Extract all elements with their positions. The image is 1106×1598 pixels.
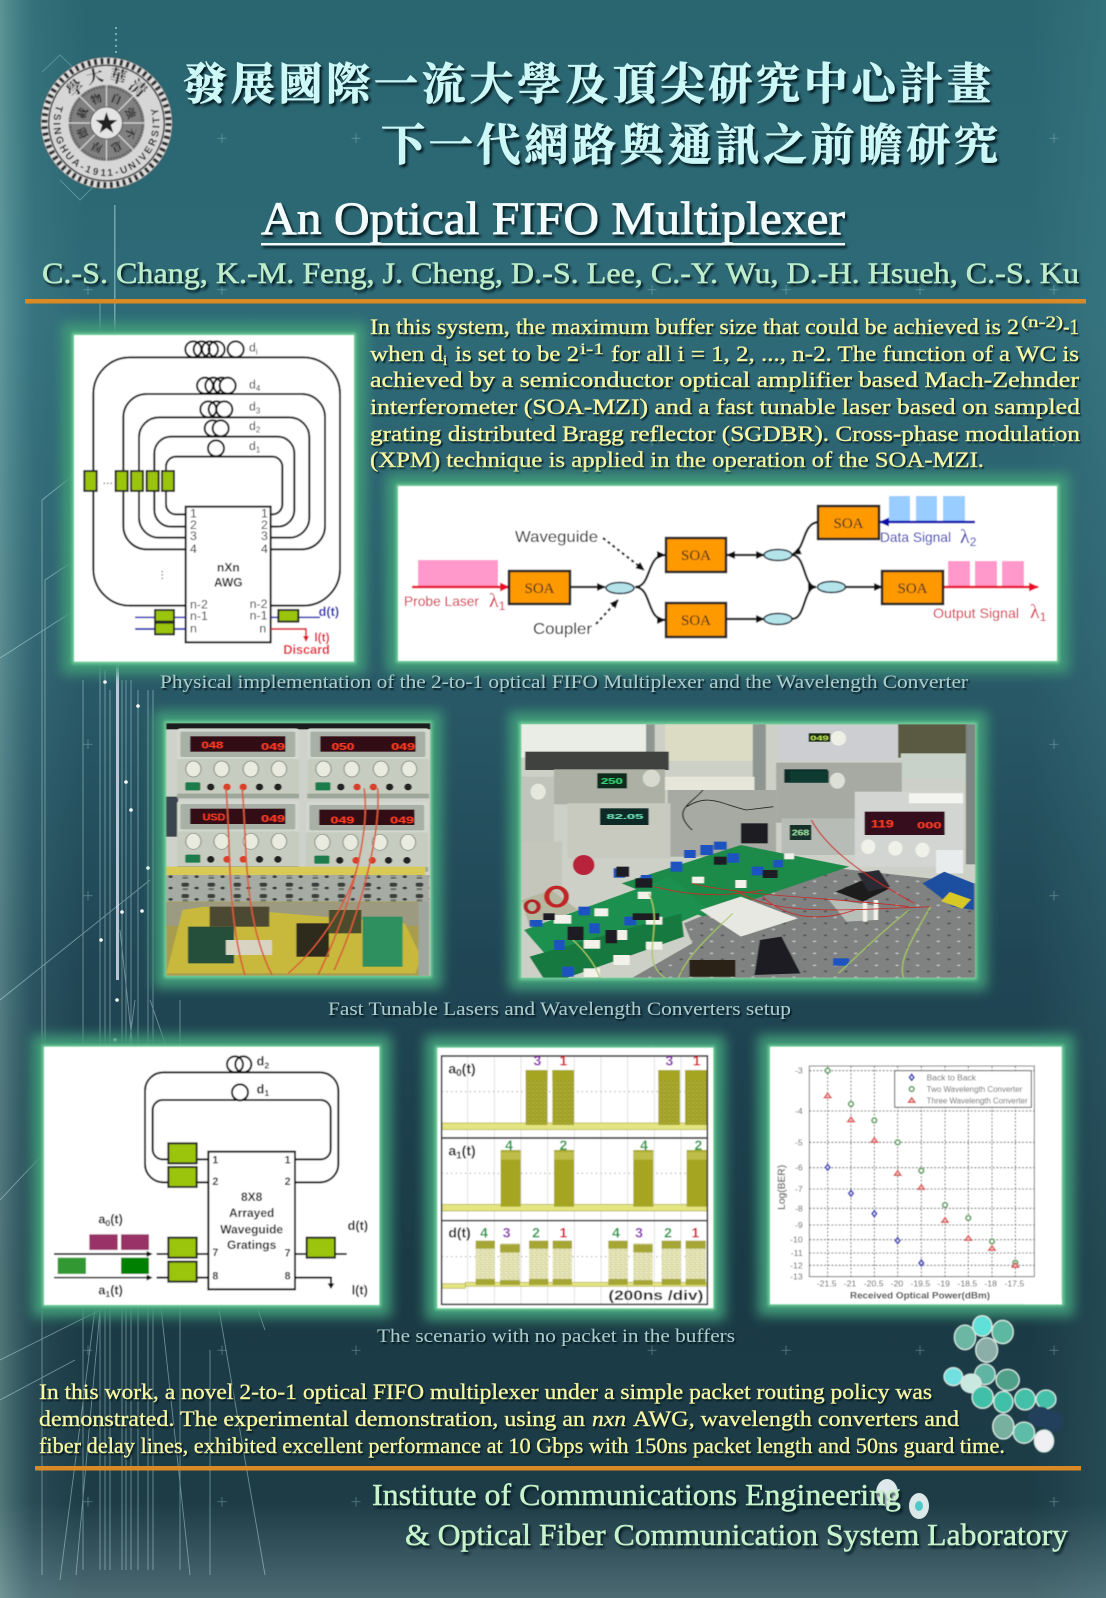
caption: lasers and converters setup: Fast Tunable Lasers and Wavelength Converters setup — [328, 1000, 791, 1020]
panel: wavelength converter diagram: 1 — [1040, 610, 1047, 624]
text block: conclusion: demonstrated. The experimental demonstration, using an — [39, 1406, 585, 1431]
panel: AWG FIFO architecture diagram: AWG — [214, 576, 243, 590]
photo: laboratory setup: 119 — [871, 818, 894, 830]
text block: system description: -1 — [1063, 314, 1079, 339]
panel: AWG FIFO architecture diagram: n-1 — [190, 609, 208, 623]
panel: 8X8 AWG scenario diagram: (t) — [110, 1212, 123, 1226]
photo: power supplies: 049 — [391, 741, 415, 752]
text block: system description: grating distributed Bragg reflector (SGDBR). Cross-phase modulation — [370, 421, 1080, 446]
text block: system description: i-1 — [580, 341, 604, 358]
panel: 8X8 AWG scenario diagram: 2 — [264, 1060, 269, 1070]
panel: 8X8 AWG scenario diagram: l(t) — [352, 1283, 368, 1297]
panel: wavelength converter diagram: SOA — [897, 581, 928, 597]
panel: 8X8 AWG scenario diagram: 7 — [285, 1248, 291, 1260]
logo: Tsinghua University seal — [40, 56, 173, 190]
panel: BER chart — [758, 1035, 1074, 1316]
photo: power supplies: USD — [203, 812, 226, 823]
panel: BER chart: -21 — [844, 1279, 856, 1289]
text block: system description: (XPM) technique is applied in the operation of the SOA-MZI. — [370, 447, 984, 472]
panel: BER chart: -17.5 — [1004, 1279, 1024, 1289]
panel: AWG FIFO architecture diagram: 4 — [256, 384, 261, 393]
panel: wavelength converter diagram: 2 — [970, 535, 977, 549]
panel: 8X8 AWG scenario diagram: 1 — [285, 1154, 291, 1166]
panel: 8X8 AWG scenario diagram: 1 — [264, 1088, 269, 1098]
panel: oscilloscope traces: 4 — [480, 1225, 488, 1241]
logo: Tsinghua University seal: 不 — [122, 125, 138, 141]
panel: AWG FIFO architecture diagram: Discard — [283, 643, 330, 657]
text block: conclusion: fiber delay lines, exhibited excellent performance at 10 Gbps with 150ns packet length and 50ns guard time. — [39, 1433, 1005, 1458]
panel: AWG FIFO architecture diagram: n — [190, 621, 197, 635]
text block: system description: (n-2) — [1021, 314, 1063, 331]
panel: oscilloscope traces: (200ns /div) — [608, 1287, 703, 1303]
logo: Tsinghua University seal: 清 — [125, 75, 151, 101]
logo: Tsinghua University seal: 載 — [74, 106, 91, 121]
panel: 8X8 AWG scenario diagram: a — [98, 1212, 105, 1226]
heading: Chinese program title: 下一代網路與通訊之前瞻研究 — [381, 121, 998, 170]
panel: AWG FIFO architecture diagram: ... — [103, 473, 113, 487]
panel: wavelength converter diagram: SOA — [681, 548, 711, 564]
caption: physical implementation: Physical implementation of the 2-to-1 optical FIFO Multiplexer and the Wavelength Converter — [160, 673, 968, 693]
panel: oscilloscope traces: d(t) — [448, 1224, 471, 1240]
decoration: fiber bubbles — [944, 1316, 1063, 1452]
photo: laboratory setup: 000 — [917, 820, 941, 831]
title: An Optical FIFO Multiplexer — [261, 193, 845, 245]
panel: oscilloscope traces: 3 — [503, 1225, 511, 1241]
logo: Tsinghua University seal: 德 — [74, 124, 91, 141]
logo: Tsinghua University seal: 自 — [109, 90, 124, 107]
panel: oscilloscope traces: 4 — [612, 1225, 620, 1241]
caption: scenario: The scenario with no packet in the buffers — [377, 1327, 735, 1347]
panel: BER chart: -18.5 — [957, 1279, 977, 1289]
panel: oscilloscope traces — [425, 1036, 725, 1320]
text block: system description: for all i = 1, 2, ..., n-2. The function of a WC is — [611, 341, 1079, 366]
panel: 8X8 AWG scenario diagram: Arrayed — [229, 1206, 274, 1220]
panel: AWG FIFO architecture diagram: d — [249, 400, 256, 414]
panel: wavelength converter diagram: Output Signal — [933, 605, 1019, 621]
logo: Tsinghua University seal: 學 — [62, 76, 88, 102]
panel: BER chart: -4 — [795, 1106, 803, 1116]
panel: 8X8 AWG scenario diagram: Waveguide — [220, 1222, 283, 1236]
panel: oscilloscope traces: 0 — [456, 1068, 462, 1079]
text block: system description — [370, 314, 1080, 472]
photo: laboratory setup: 82.05 — [606, 813, 644, 821]
panel: wavelength converter diagram: λ — [489, 590, 499, 612]
panel: oscilloscope traces: 1 — [691, 1225, 699, 1241]
panel: 8X8 AWG scenario diagram: 0 — [105, 1218, 110, 1228]
panel: oscilloscope traces: 3 — [665, 1053, 673, 1069]
panel: BER chart: -8 — [795, 1203, 803, 1213]
text block: conclusion: In this work, a novel 2-to-1 optical FIFO multiplexer under a simple packet routing policy was — [39, 1379, 932, 1404]
panel: AWG FIFO architecture diagram: n — [259, 621, 266, 635]
text block: system description: achieved by a semiconductor optical amplifier based Mach-Zehnder — [370, 367, 1080, 392]
panel: 8X8 AWG scenario diagram: d — [257, 1055, 264, 1069]
panel: oscilloscope traces: a — [448, 1143, 456, 1159]
panel: AWG FIFO architecture diagram: n-2 — [250, 597, 268, 611]
panel: 8X8 AWG scenario diagram: Gratings — [227, 1238, 277, 1252]
panel: oscilloscope traces: 1 — [456, 1150, 462, 1161]
panel: AWG FIFO architecture diagram: n-1 — [250, 608, 268, 622]
text block: system description: i — [443, 353, 447, 369]
authors: C.-S. Chang, K.-M. Feng, J. Cheng, D.-S. Lee, C.-Y. Wu, D.-H. Hsueh, C.-S. Ku — [42, 257, 1079, 290]
photo: power supplies: 049 — [261, 741, 285, 752]
panel: 8X8 AWG scenario diagram — [32, 1035, 391, 1317]
panel: AWG FIFO architecture diagram: l(t) — [314, 631, 330, 645]
panel: AWG FIFO architecture diagram: 1 — [261, 506, 268, 520]
panel: oscilloscope traces: 2 — [664, 1225, 672, 1241]
panel: AWG FIFO architecture diagram: d — [249, 341, 256, 355]
panel: AWG FIFO architecture diagram: d(t) — [319, 605, 339, 619]
panel: BER chart: -13 — [790, 1272, 803, 1282]
panel: oscilloscope traces: 1 — [559, 1053, 567, 1069]
panel: wavelength converter diagram: Waveguide — [515, 529, 598, 546]
text block: system description: interferometer (SOA-MZI) and a fast tunable laser based on sampled — [370, 394, 1080, 419]
photo: power supplies: 049 — [331, 814, 354, 826]
panel: oscilloscope traces: 3 — [533, 1053, 541, 1069]
panel: AWG FIFO architecture diagram: d — [249, 419, 256, 433]
panel: 8X8 AWG scenario diagram: d — [257, 1082, 264, 1096]
panel: AWG FIFO architecture diagram: 2 — [190, 518, 197, 532]
panel: AWG FIFO architecture diagram: 3 — [261, 529, 268, 543]
photo: power supplies: 049 — [261, 813, 285, 824]
panel: AWG FIFO architecture diagram: 3 — [256, 406, 261, 415]
panel: 8X8 AWG scenario diagram: 1 — [212, 1154, 218, 1166]
photo: power supplies: 048 — [201, 740, 224, 751]
panel: 8X8 AWG scenario diagram: d(t) — [348, 1219, 368, 1233]
panel: AWG FIFO architecture diagram: d — [249, 439, 256, 453]
panel: AWG FIFO architecture diagram: 2 — [256, 426, 261, 435]
text block: system description: when d — [370, 341, 443, 366]
panel: AWG FIFO architecture diagram: 4 — [190, 542, 197, 556]
panel: oscilloscope traces: 1 — [693, 1053, 701, 1069]
panel: BER chart: -21.5 — [817, 1279, 837, 1289]
panel: oscilloscope traces: (t) — [462, 1060, 476, 1076]
panel: oscilloscope traces: 2 — [559, 1137, 567, 1153]
photo: laboratory setup: 049 — [810, 734, 829, 743]
panel: AWG FIFO architecture diagram: 3 — [190, 529, 197, 543]
photo: power supplies: 049 — [390, 814, 414, 826]
logo: Tsinghua University seal: 息 — [108, 138, 124, 156]
logo: Tsinghua University seal: 強 — [122, 105, 139, 122]
panel: BER chart: -3 — [795, 1066, 803, 1076]
panel: BER chart: Log(BER) — [777, 1165, 788, 1210]
panel: AWG FIFO architecture diagram: nXn — [217, 561, 240, 575]
panel: 8X8 AWG scenario diagram: (t) — [110, 1283, 123, 1297]
photo: power supplies: 050 — [332, 741, 354, 752]
panel: wavelength converter diagram: Data Signal — [880, 529, 951, 545]
panel: BER chart: -11 — [791, 1248, 803, 1258]
logo: Tsinghua University seal: 大 — [84, 66, 106, 88]
text block: system description: In this system, the maximum buffer size that could be achieved is 2 — [370, 314, 1019, 339]
panel: wavelength converter diagram: Coupler — [533, 621, 593, 638]
text block: system description: is set to be 2 — [455, 341, 579, 366]
panel: oscilloscope traces: a — [448, 1060, 456, 1076]
photo: laboratory setup: 268 — [792, 828, 810, 838]
footer: affiliation: Institute of Communications Engineering — [372, 1477, 901, 1512]
panel: AWG FIFO architecture diagram: d — [249, 377, 256, 391]
logo: Tsinghua University seal: 厚 — [89, 139, 104, 156]
panel: AWG FIFO architecture diagram: 2 — [261, 518, 268, 532]
heading: Chinese program title — [183, 60, 998, 170]
panel: oscilloscope traces: 4 — [640, 1137, 648, 1153]
heading: Chinese program title: 發展國際一流大學及頂尖研究中心計畫 — [183, 60, 991, 109]
photo: laboratory setup: 250 — [601, 777, 623, 786]
panel: BER chart: -7 — [795, 1184, 803, 1194]
panel: wavelength converter diagram: λ — [960, 526, 970, 548]
panel: AWG FIFO architecture diagram: ... — [159, 570, 173, 580]
panel: oscilloscope traces: 2 — [532, 1225, 540, 1241]
panel: BER chart: Received Optical Power(dBm) — [850, 1290, 990, 1300]
panel: BER chart: -20.5 — [864, 1279, 884, 1289]
photo: power supplies — [154, 711, 442, 988]
logo: Tsinghua University seal: 物 — [89, 90, 104, 108]
text block: conclusion: nxn — [592, 1406, 626, 1431]
panel: oscilloscope traces: (t) — [462, 1143, 476, 1159]
panel: 8X8 AWG scenario diagram: 2 — [212, 1176, 218, 1188]
panel: 8X8 AWG scenario diagram: 1 — [105, 1289, 110, 1299]
panel: oscilloscope traces: 4 — [505, 1137, 513, 1153]
panel: wavelength converter diagram: Probe Laser — [404, 593, 479, 609]
panel: AWG FIFO architecture diagram: i — [256, 347, 258, 356]
panel: BER chart: -19.5 — [910, 1279, 930, 1289]
footer: affiliation: & Optical Fiber Communication System Laboratory — [405, 1517, 1069, 1552]
footer: affiliation — [372, 1477, 1069, 1552]
panel: wavelength converter diagram — [386, 474, 1069, 673]
panel: 8X8 AWG scenario diagram: 8 — [285, 1270, 291, 1282]
panel: BER chart: -20 — [891, 1279, 903, 1289]
panel: 8X8 AWG scenario diagram: 7 — [212, 1247, 218, 1259]
panel: 8X8 AWG scenario diagram: 8 — [212, 1270, 218, 1282]
photo: laboratory setup — [509, 712, 987, 990]
panel: BER chart: -10 — [790, 1235, 803, 1245]
panel: oscilloscope traces: 1 — [559, 1225, 567, 1241]
panel: wavelength converter diagram: SOA — [833, 516, 864, 532]
panel: BER chart: -6 — [795, 1163, 803, 1173]
panel: AWG FIFO architecture diagram: 1 — [256, 446, 261, 455]
panel: BER chart: -12 — [790, 1260, 803, 1270]
panel: 8X8 AWG scenario diagram: a — [98, 1283, 105, 1297]
panel: wavelength converter diagram: SOA — [681, 613, 711, 629]
panel: BER chart: -18 — [984, 1279, 997, 1289]
panel: BER chart: Two Wavelength Converter — [927, 1085, 1023, 1094]
logo: Tsinghua University seal: 華 — [107, 65, 129, 88]
panel: AWG FIFO architecture diagram — [62, 323, 366, 674]
logo: Tsinghua University seal: TSINGHUA-1911-UNIVERSITY — [53, 106, 160, 177]
text block: conclusion: AWG, wavelength converters and — [633, 1406, 959, 1431]
panel: wavelength converter diagram: λ — [1030, 601, 1040, 623]
text block: conclusion — [39, 1379, 1005, 1458]
panel: oscilloscope traces: 2 — [694, 1137, 702, 1153]
panel: AWG FIFO architecture diagram: 4 — [261, 542, 268, 556]
panel: oscilloscope traces: 3 — [635, 1225, 643, 1241]
panel: BER chart: Three Wavelength Converter — [927, 1096, 1028, 1105]
decoration: lower fiber beads — [876, 1479, 929, 1519]
panel: BER chart: Back to Back — [927, 1073, 976, 1082]
panel: AWG FIFO architecture diagram: n-2 — [190, 598, 208, 612]
panel: BER chart: -9 — [795, 1220, 803, 1230]
panel: 8X8 AWG scenario diagram: 8X8 — [241, 1190, 263, 1204]
panel: wavelength converter diagram: 1 — [499, 599, 506, 613]
panel: BER chart: -5 — [795, 1137, 803, 1147]
panel: BER chart: -19 — [937, 1279, 950, 1289]
panel: 8X8 AWG scenario diagram: 2 — [285, 1176, 291, 1188]
panel: wavelength converter diagram: SOA — [524, 581, 555, 597]
panel: AWG FIFO architecture diagram: 1 — [190, 506, 197, 520]
